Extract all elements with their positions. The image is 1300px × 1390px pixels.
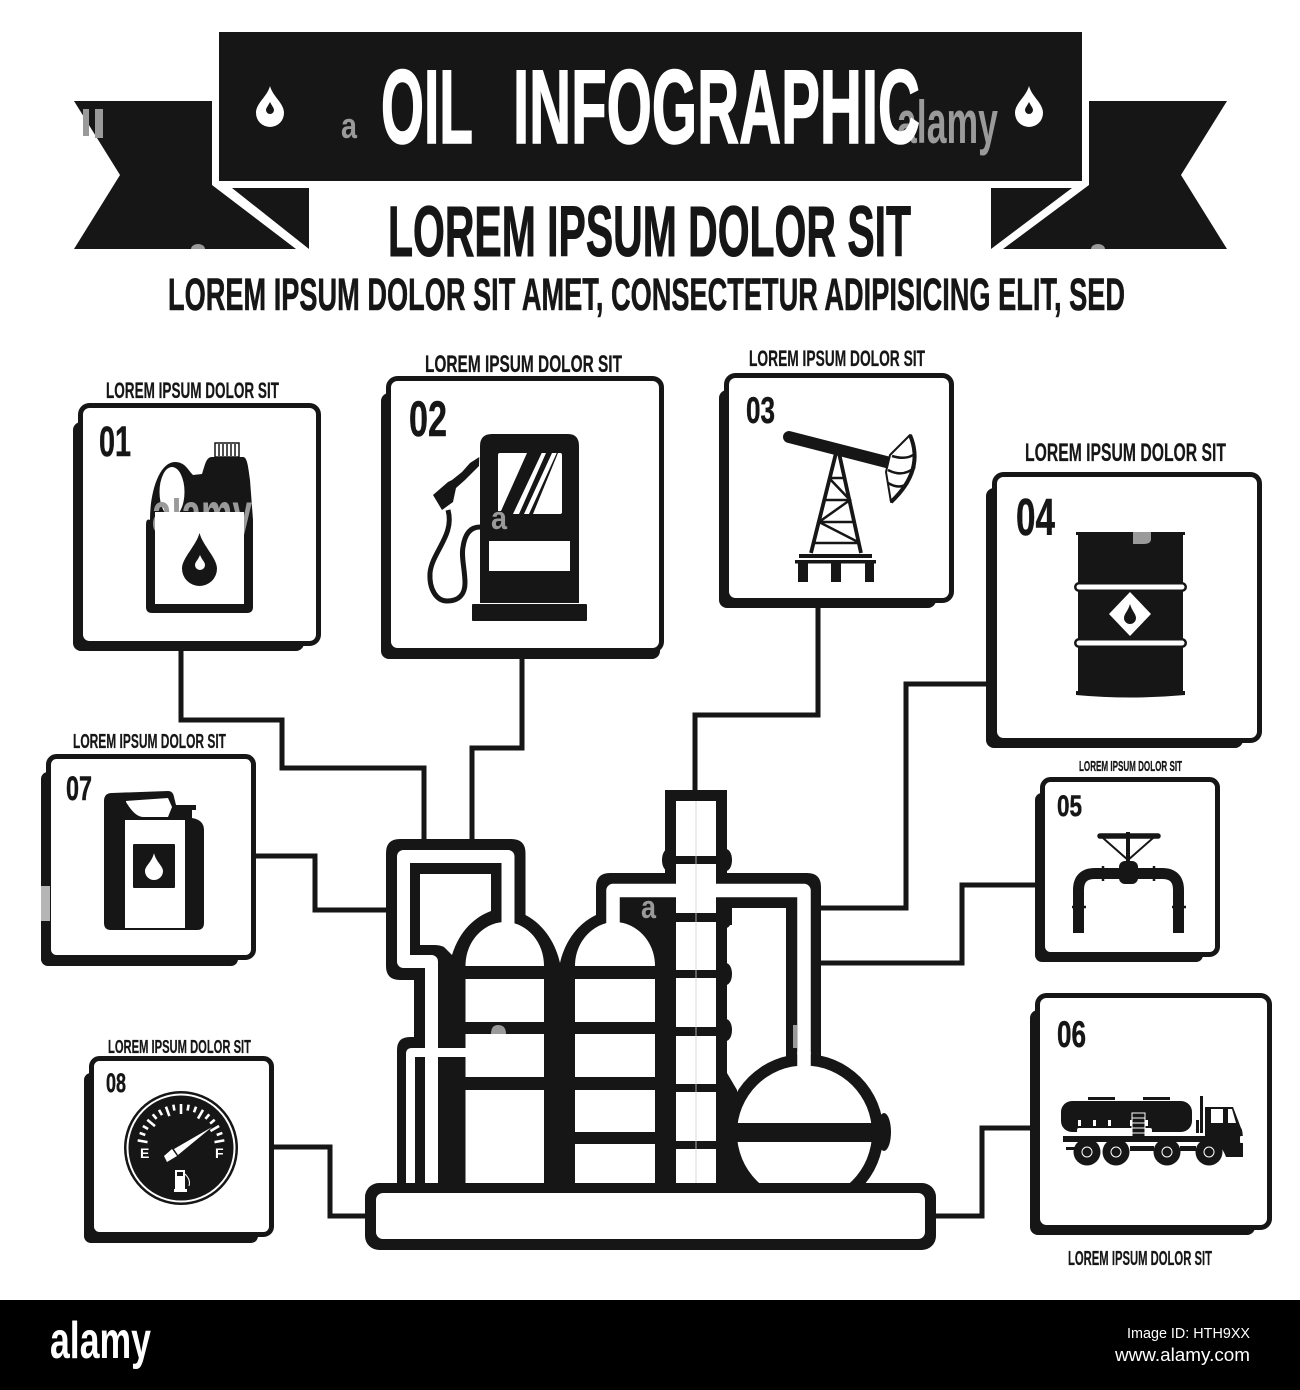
refinery silhouette bbox=[386, 790, 883, 1190]
icon: gauge bbox=[124, 1091, 238, 1205]
icon: barrel bbox=[1074, 532, 1187, 698]
icon: fuel pump bbox=[430, 434, 587, 621]
connector lines bbox=[181, 606, 1040, 1216]
watermark bbox=[1133, 532, 1151, 544]
tower collar rivets bbox=[662, 849, 732, 871]
number: 07 bbox=[66, 770, 92, 808]
icon: valve bbox=[1072, 832, 1186, 933]
header banner bbox=[74, 32, 1227, 249]
panel 01: oil canister bbox=[73, 378, 318, 651]
icon: canister bbox=[146, 443, 253, 613]
card bbox=[986, 474, 1260, 748]
refinery illustration bbox=[365, 790, 936, 1250]
inner white panel bbox=[727, 908, 786, 1100]
card bbox=[73, 406, 318, 651]
panel 03: pumpjack bbox=[719, 346, 952, 608]
watermarks: a bbox=[641, 889, 656, 925]
icon: gauge: F bbox=[215, 1145, 224, 1161]
card bbox=[1035, 780, 1218, 962]
number: 06 bbox=[1057, 1014, 1086, 1055]
card bbox=[84, 1058, 272, 1243]
tank one bbox=[406, 922, 544, 1193]
label: LOREM IPSUM DOLOR SIT bbox=[1079, 758, 1182, 775]
icon: right drop bbox=[1015, 86, 1043, 127]
number: 03 bbox=[746, 390, 775, 431]
title: INFOGRAPHIC bbox=[513, 49, 920, 166]
pipe window bbox=[420, 874, 491, 955]
base plate bbox=[365, 1183, 936, 1250]
panel 04: barrel bbox=[986, 439, 1260, 748]
alamy logo: alamy bbox=[50, 1312, 151, 1370]
right ribbon tail bbox=[991, 101, 1227, 249]
panel 06: tanker truck bbox=[1030, 996, 1270, 1270]
card bbox=[719, 376, 952, 608]
title bbox=[381, 49, 920, 166]
icon: gauge: E bbox=[140, 1145, 149, 1161]
banner watermarks: alamy bbox=[897, 89, 998, 156]
icon: truck bbox=[1061, 1096, 1244, 1166]
watermark: a bbox=[491, 500, 507, 536]
tower rivets bbox=[720, 906, 732, 1041]
panel 02: fuel pump bbox=[381, 351, 662, 659]
banner body bbox=[219, 32, 1082, 181]
footer bar bbox=[0, 1300, 1300, 1390]
number: 02 bbox=[409, 391, 447, 447]
number: 04 bbox=[1016, 489, 1055, 547]
number: 08 bbox=[106, 1068, 126, 1098]
number: 05 bbox=[1057, 790, 1082, 823]
panel 07: jerry can bbox=[41, 731, 254, 966]
left pipe bbox=[404, 856, 508, 1193]
watermarks bbox=[491, 889, 797, 1048]
panel 05: pipeline valve bbox=[1035, 758, 1218, 962]
icon: left drop bbox=[256, 86, 284, 127]
label: LOREM IPSUM DOLOR SIT bbox=[73, 731, 226, 753]
panel 08: fuel gauge bbox=[84, 1037, 272, 1243]
tank two bbox=[575, 922, 655, 1193]
icon: pumpjack bbox=[789, 435, 915, 582]
icon: jerry can bbox=[104, 791, 204, 930]
label: LOREM IPSUM DOLOR SIT bbox=[106, 378, 279, 403]
title: OIL bbox=[381, 49, 473, 166]
card bbox=[381, 378, 662, 659]
subtitle: LOREM IPSUM DOLOR SIT bbox=[388, 193, 911, 272]
watermark bbox=[41, 886, 50, 921]
watermark: alamy bbox=[152, 481, 252, 544]
number: 01 bbox=[99, 418, 131, 466]
website: www.alamy.com bbox=[1114, 1345, 1250, 1365]
ribbon watermarks bbox=[83, 109, 1105, 249]
label: LOREM IPSUM DOLOR SIT bbox=[108, 1037, 251, 1057]
left ribbon tail bbox=[74, 101, 309, 249]
banner watermarks bbox=[341, 89, 998, 156]
image id: Image ID: HTH9XX bbox=[1127, 1325, 1250, 1342]
right pipe bbox=[613, 890, 804, 1072]
banner watermarks: a bbox=[341, 105, 358, 146]
label: LOREM IPSUM DOLOR SIT bbox=[425, 351, 622, 378]
spherical tank bbox=[726, 1052, 891, 1212]
label: LOREM IPSUM DOLOR SIT bbox=[749, 346, 925, 371]
distillation tower bbox=[676, 801, 716, 1193]
card bbox=[41, 756, 254, 966]
card bbox=[1030, 996, 1270, 1235]
